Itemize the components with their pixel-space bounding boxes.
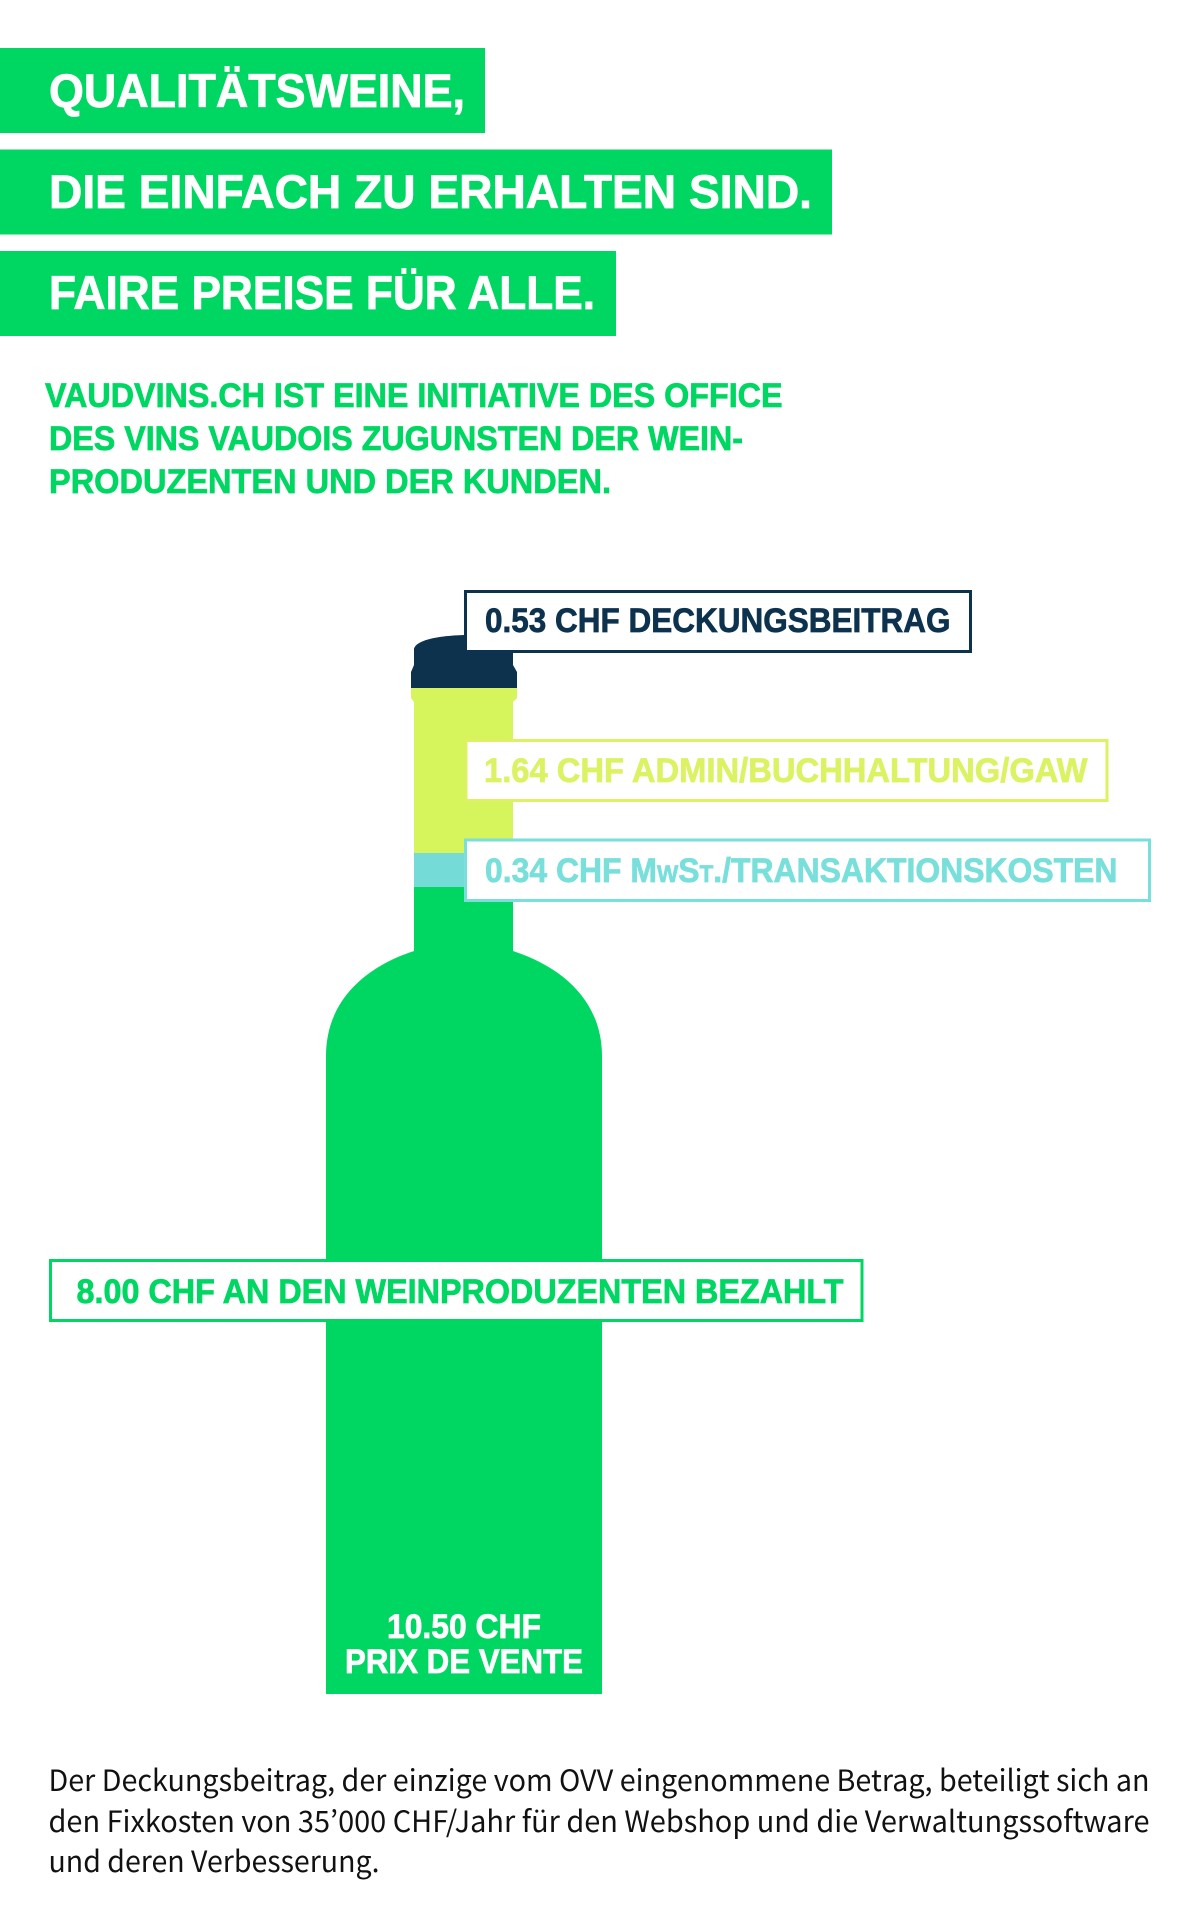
- sale price: [345, 1608, 583, 1681]
- sale price: PRIX DE VENTE: [345, 1643, 583, 1681]
- intro text: VAUDVINS.CH IST EINE INITIATIVE DES OFFICE: [45, 377, 782, 415]
- title banners: [0, 48, 832, 336]
- label: contribution margin: 0.53 CHF DECKUNGSBEITRAG: [485, 602, 950, 640]
- label: admin: [466, 740, 1107, 800]
- label: paid to producers: 8.00 CHF AN DEN WEINPRODUZENTEN BEZAHLT: [76, 1273, 844, 1311]
- banner: die einfach zu erhalten sind: DIE EINFACH ZU ERHALTEN SIND.: [49, 165, 812, 218]
- footnote: Der Deckungsbeitrag, der einzige vom OVV eingenommene Betrag, beteiligt sich an: [48, 1758, 1150, 1800]
- label: VAT and transaction costs: [466, 840, 1150, 900]
- bottle chart: [326, 635, 602, 1694]
- banner: faire preise für alle: FAIRE PREISE FÜR ALLE.: [49, 266, 595, 319]
- banner: die einfach zu erhalten sind: [0, 150, 832, 234]
- bottle cap: contribution margin: [411, 635, 517, 688]
- label: VAT and transaction costs: 0.34 CHF MWST./TRANSAKTIONSKOSTEN: [485, 852, 1118, 890]
- footnote: und deren Verbesserung.: [48, 1839, 380, 1881]
- footnote: den Fixkosten von 35’000 CHF/Jahr für den Webshop und die Verwaltungssoftware: [48, 1799, 1150, 1841]
- intro text: PRODUZENTEN UND DER KUNDEN.: [49, 463, 611, 501]
- label: paid to producers: [50, 1260, 862, 1320]
- sale price: 10.50 CHF: [387, 1608, 541, 1646]
- intro text: DES VINS VAUDOIS ZUGUNSTEN DER WEIN-: [49, 420, 743, 458]
- label: contribution margin: [466, 592, 970, 652]
- bottle body: producer share: [326, 887, 602, 1694]
- intro text: [45, 377, 782, 501]
- label: admin: 1.64 CHF ADMIN/BUCHHALTUNG/GAW: [484, 752, 1088, 790]
- bottle segment: admin: [411, 688, 517, 853]
- bottle segment: VAT and transaction costs: [414, 853, 513, 887]
- footnote: [48, 1758, 1150, 1881]
- banner: faire preise für alle: [0, 251, 616, 336]
- banner: Qualitätsweine: [0, 48, 485, 133]
- banner: Qualitätsweine: QUALITÄTSWEINE,: [49, 64, 465, 117]
